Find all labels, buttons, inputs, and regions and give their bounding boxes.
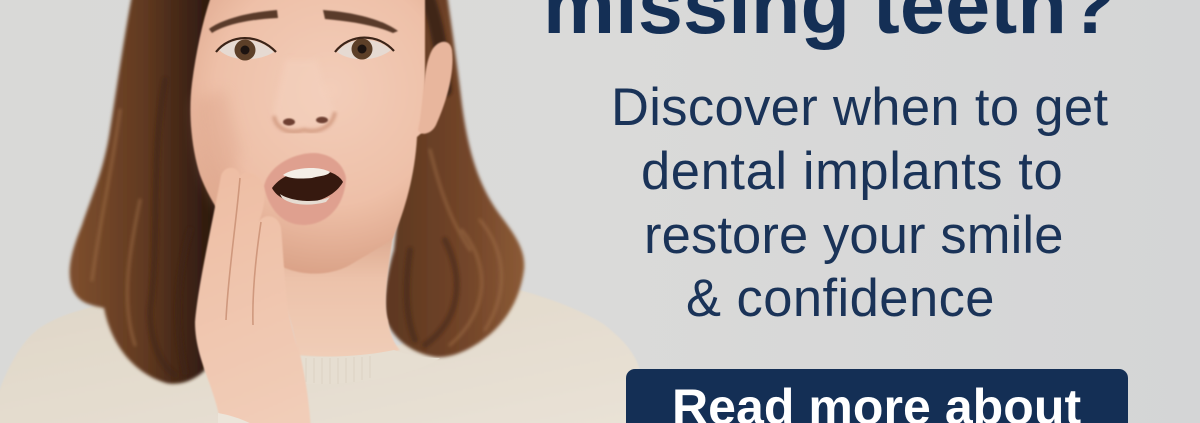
ear [418,42,453,134]
line 1: Discover when to get [611,78,1108,137]
hair strands [92,0,501,375]
line 4: & confidence [686,269,995,328]
finger lines [226,178,261,325]
collar ribbing [306,356,370,384]
sweater cuff [218,413,262,423]
hair right [385,0,524,357]
line 3: restore your smile [644,206,1064,265]
left eye [216,38,276,60]
sweater collar [299,350,440,384]
cheek shading [195,90,240,215]
mouth [264,153,346,225]
nose [274,60,335,131]
face [190,0,425,274]
left eyebrow [209,10,278,33]
button [626,369,1128,423]
hair left [70,0,230,384]
line 2: dental implants to [641,142,1063,201]
right eyebrow [323,10,398,33]
neck [255,215,400,357]
subheading text [611,78,1108,328]
photo: worried woman holding her cheek [0,0,642,423]
sweater [0,290,642,423]
right eye [335,38,394,60]
hand on cheek [195,168,311,423]
